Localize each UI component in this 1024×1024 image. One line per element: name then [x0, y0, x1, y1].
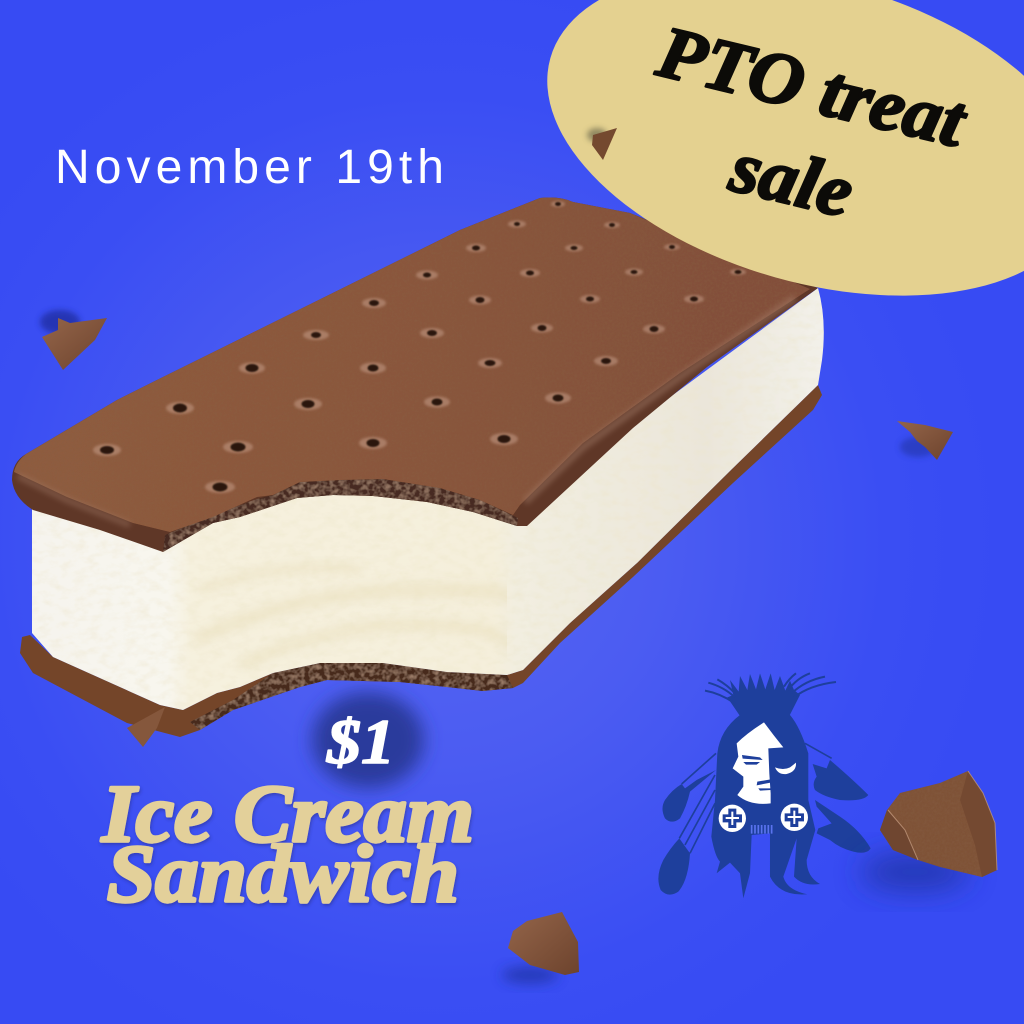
medallions [719, 804, 808, 832]
left upper feather [662, 753, 716, 822]
hair [711, 715, 820, 898]
bottom cookie bite crumb [190, 663, 513, 730]
shadow [860, 852, 970, 892]
fringe [752, 825, 772, 834]
product name [101, 768, 474, 919]
cookie edge [12, 198, 818, 552]
bottom cookie [20, 385, 822, 737]
chocolate chunk: large [860, 771, 997, 892]
right eye [775, 763, 796, 774]
price: $1 [326, 707, 395, 777]
ice cream filling [32, 288, 824, 710]
left lower feather [658, 775, 715, 895]
headdress [705, 673, 836, 716]
ice cream sandwich [12, 198, 824, 737]
product name: Ice Cream [101, 768, 474, 859]
top cookie [12, 198, 818, 552]
oval badge [510, 0, 1024, 352]
chocolate chunk: on sandwich corner [127, 707, 165, 747]
date: November 19th [55, 141, 444, 194]
eye and mouth details [742, 755, 771, 791]
face [733, 722, 783, 804]
logo: school emblem [658, 673, 871, 898]
badge heading: PTO treat [649, 11, 975, 164]
right upper feather [805, 743, 868, 800]
cookie surface [14, 198, 810, 532]
chocolate chunk: left [40, 310, 107, 370]
chocolate chunk: right [897, 421, 953, 460]
chocolate chunk: on badge [587, 128, 617, 160]
cookie hole halos [93, 201, 746, 493]
badge heading [649, 11, 975, 234]
speech oval: PTO treat sale [510, 0, 1024, 352]
ice cream scooped ridges [195, 568, 513, 665]
cookie holes [100, 202, 742, 492]
product name: Sandwich [107, 828, 459, 919]
right lower feather [815, 800, 871, 853]
price glow [312, 692, 424, 788]
cookie edge highlight [525, 298, 795, 502]
cookie bite crumb edge [163, 479, 518, 552]
badge heading: sale [722, 126, 861, 234]
chocolate chunk: lower [502, 912, 579, 984]
cookie left highlight [18, 476, 130, 525]
